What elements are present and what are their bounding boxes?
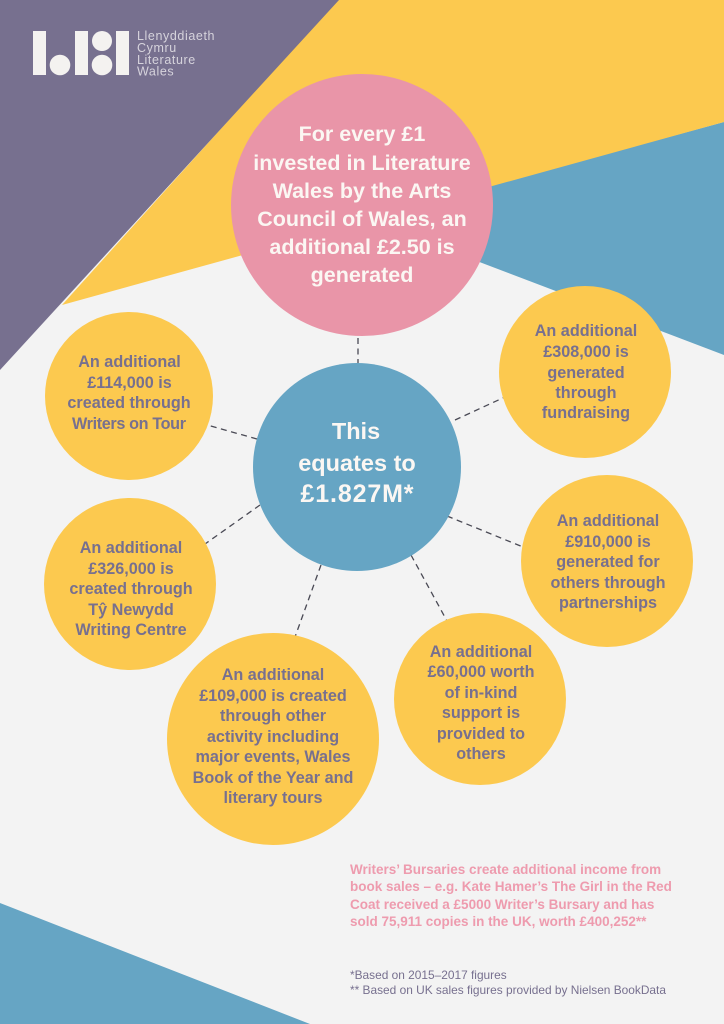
yellow circle: Writers on Tour: created through xyxy=(67,394,191,412)
background: blue shape right xyxy=(440,122,724,355)
pink circle: headline: For every £1 xyxy=(299,122,425,146)
pink circle: headline: generated xyxy=(311,263,413,287)
yellow circle: Writers on Tour xyxy=(45,312,213,480)
footnotes: *Based on 2015–2017 figures xyxy=(350,968,507,982)
yellow circle: partnerships: partnerships xyxy=(559,594,657,612)
yellow circle: Writers on Tour: £114,000 is xyxy=(87,374,172,392)
logo: Cymru xyxy=(137,41,177,55)
yellow circle: partnerships: An additional xyxy=(557,512,659,530)
yellow circle: fundraising xyxy=(499,286,671,458)
pink circle: headline xyxy=(231,74,493,336)
bursary note: Writers’ Bursaries create additional income from xyxy=(350,862,661,877)
yellow circle: in-kind: of in-kind xyxy=(445,684,517,702)
yellow circle: partnerships: generated for xyxy=(556,553,660,571)
yellow circle: in-kind: others xyxy=(456,745,506,763)
yellow circle: in-kind xyxy=(394,613,566,785)
blue circle: total: This xyxy=(332,418,380,444)
pink circle: headline: Wales by the Arts xyxy=(273,179,451,203)
blue circle: total xyxy=(253,363,461,571)
yellow circle: fundraising: An additional xyxy=(535,322,637,340)
yellow circle: Ty Newydd: An additional xyxy=(80,539,182,557)
footnotes xyxy=(350,968,666,997)
yellow circle: partnerships: £910,000 is xyxy=(565,533,651,551)
yellow circle: in-kind: An additional xyxy=(430,643,532,661)
pink circle: headline: additional £2.50 is xyxy=(269,235,455,259)
yellow circle: Writers on Tour: Writers on Tour xyxy=(72,415,187,433)
yellow circle: in-kind: provided to xyxy=(437,725,525,743)
footnotes: ** Based on UK sales figures provided by Nielsen BookData xyxy=(350,983,666,997)
yellow circle: other activity xyxy=(167,633,379,845)
yellow circle: fundraising: through xyxy=(555,384,617,402)
yellow circle: fundraising: fundraising xyxy=(542,404,630,422)
logo: Llenyddiaeth xyxy=(137,29,215,43)
yellow circle: Ty Newydd: Tŷ Newydd xyxy=(88,601,174,619)
logo: Wales xyxy=(137,64,174,78)
yellow circle: partnerships xyxy=(521,475,693,647)
yellow circle: other activity: activity including xyxy=(207,728,339,746)
pink circle: headline: invested in Literature xyxy=(253,151,471,175)
yellow circle: in-kind: £60,000 worth xyxy=(427,663,535,681)
logo xyxy=(33,29,215,78)
yellow circle: other activity: through other xyxy=(220,707,327,725)
yellow circle: in-kind: support is xyxy=(442,704,520,722)
yellow circle: Ty Newydd: created through xyxy=(69,580,193,598)
yellow circle: Ty Newydd: £326,000 is xyxy=(88,560,174,578)
logo: Literature xyxy=(137,53,196,67)
yellow circle: partnerships: others through xyxy=(550,574,666,592)
bursary note: Coat received a £5000 Writer’s Bursary and has xyxy=(350,897,654,912)
bursary note xyxy=(350,862,672,929)
yellow circle: Ty Newydd xyxy=(44,498,216,670)
blue circle: total: £1.827M* xyxy=(300,480,414,508)
yellow circle: fundraising: generated xyxy=(547,364,625,382)
bursary note: sold 75,911 copies in the UK, worth £400,252** xyxy=(350,914,647,929)
yellow circle: Ty Newydd: Writing Centre xyxy=(75,621,187,639)
yellow circle: other activity: An additional xyxy=(222,666,324,684)
yellow circle: other activity: literary tours xyxy=(224,789,322,807)
background: blue shape bottom left xyxy=(0,903,310,1024)
blue circle: total: equates to xyxy=(298,450,416,476)
yellow circle: Writers on Tour: An additional xyxy=(78,353,181,371)
bursary note: book sales – e.g. Kate Hamer’s The Girl in the Red xyxy=(350,879,672,894)
background: yellow shape xyxy=(62,0,724,305)
background: purple shape xyxy=(0,0,339,370)
yellow circle: fundraising: £308,000 is xyxy=(543,343,629,361)
yellow circle: other activity: Book of the Year and xyxy=(193,769,353,787)
pink circle: headline: Council of Wales, an xyxy=(257,207,467,231)
yellow circle: other activity: major events, Wales xyxy=(195,748,351,766)
yellow circle: other activity: £109,000 is created xyxy=(199,687,347,705)
dashed connectors xyxy=(205,338,523,637)
